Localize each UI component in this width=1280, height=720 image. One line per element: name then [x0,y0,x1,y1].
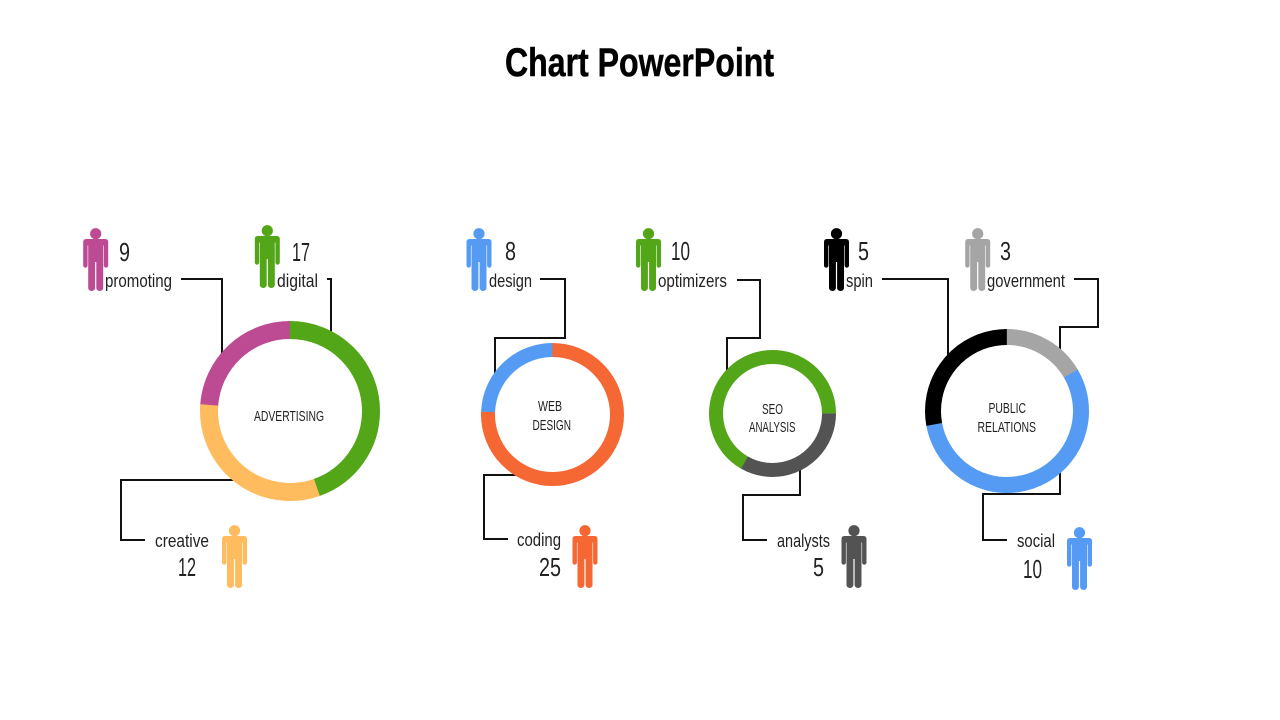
value: optimizers 10: 10 [671,236,690,266]
label: digital: digital [277,271,318,291]
label: analysts: analysts [777,531,830,551]
label: design: design [489,271,532,291]
donut chart: seo analysis [695,336,850,491]
label: creative: creative [155,531,209,551]
donut label: web design [532,398,571,434]
value: government 3: 3 [1000,236,1011,266]
value: analysts 5: 5 [813,552,824,582]
panel: public relations [824,228,1108,590]
donut label: seo analysis: SEO [762,401,783,418]
value: spin 5: 5 [858,236,869,266]
icon: person government [965,228,990,291]
label: coding: coding [517,530,561,550]
connector: coding [484,475,518,539]
panel: seo analysis [636,228,866,588]
icon: person creative [222,525,247,588]
connector: design [495,279,565,374]
connector: government [1060,279,1098,351]
icon: person spin [824,228,849,291]
donut label: public relations: RELATIONS [978,419,1036,436]
icon: person digital [255,225,280,288]
donut label: seo analysis [749,401,796,436]
panel: web design [466,228,620,588]
connector: optimizers [727,280,760,372]
donut label: public relations: PUBLIC [988,400,1026,417]
value: digital 17: 17 [292,237,310,267]
label: promoting: promoting [105,271,172,291]
title: Chart PowerPoint [505,41,774,85]
value: promoting 9: 9 [119,237,130,267]
donut label: public relations [978,400,1036,436]
connector: analysts [743,468,800,540]
icon: person promoting [83,228,108,291]
donut label: web design: DESIGN [532,417,571,434]
value: coding 25: 25 [539,552,561,582]
donut label: seo analysis: ANALYSIS [749,419,796,436]
panel: advertising [83,225,393,588]
donut chart: advertising [187,308,393,514]
icon: person optimizers [636,228,661,291]
donut chart: web design [485,347,620,482]
value: social 10: 10 [1023,554,1042,584]
connector: spin [882,279,948,357]
connector: digital [327,279,331,333]
donut chart: public relations [906,310,1108,512]
label: government: government [987,271,1065,291]
value: creative 12: 12 [178,552,196,582]
icon: person design [466,228,492,291]
connector: promoting [181,279,222,354]
label: optimizers: optimizers [658,271,727,291]
donut label: web design: WEB [538,398,562,415]
value: design 8: 8 [505,236,516,266]
connector: social [983,468,1060,540]
connector: creative [121,480,234,540]
label: social: social [1017,531,1055,551]
donut label: advertising: ADVERTISING [254,408,324,425]
icon: person coding [572,525,598,588]
icon: person analysts [842,525,866,588]
label: spin: spin [846,271,873,291]
icon: person social [1067,527,1092,590]
